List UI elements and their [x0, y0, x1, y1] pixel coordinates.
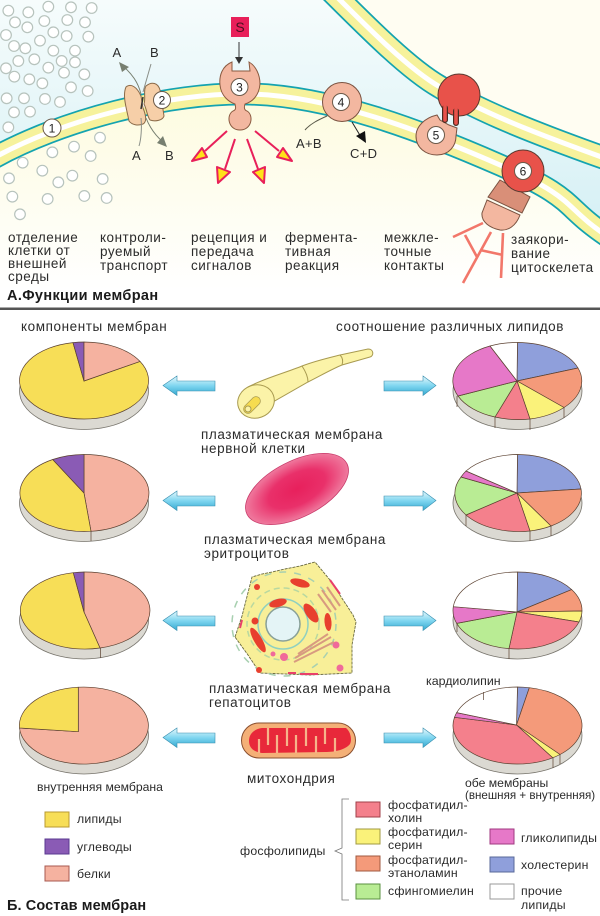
captions: сигналов [191, 258, 252, 273]
legend: phospholipids [240, 798, 474, 900]
anchoring protein 6 with cytoskeleton [453, 150, 544, 283]
legend: components: углеводы [77, 840, 132, 854]
captions: отделение [8, 230, 78, 245]
transport arrows and labels: A [132, 148, 141, 163]
captions: рецепция и [191, 230, 267, 245]
captions: точные [384, 244, 432, 259]
legend: other lipids: холестерин [521, 858, 589, 872]
legend: components [45, 812, 132, 881]
arrow: to lipids [384, 376, 436, 396]
panel: membrane composition [7, 319, 597, 914]
captions: транспорт [100, 258, 168, 273]
captions: фермента- [285, 230, 358, 245]
signal molecule S [231, 17, 249, 64]
receptor protein 3: 3 [236, 80, 243, 94]
arrow: to components [163, 376, 215, 396]
captions: среды [8, 269, 50, 284]
icon: mitochondrion [242, 723, 356, 758]
column heading: components: компоненты мембран [21, 319, 167, 334]
captions: межкле- [384, 230, 439, 245]
caption: inner membrane: внутренняя мембрана [37, 780, 163, 794]
legend: phospholipids: серин [388, 838, 422, 852]
transport arrows and labels: B [165, 148, 174, 163]
caption: hepatocyte membrane: гепатоцитов [209, 695, 292, 710]
enzyme 4: A+B [296, 136, 322, 151]
legend: other lipids: гликолипиды [521, 831, 597, 845]
enzyme 4 [296, 82, 377, 161]
pie: mitochondrial lipids [453, 687, 582, 774]
captions: контроли- [100, 230, 166, 245]
caption: erythrocyte membrane: эритроцитов [204, 546, 290, 561]
arrow: to lipids [384, 491, 436, 510]
signal molecule S: S [235, 19, 245, 35]
captions: заякори- [511, 232, 569, 247]
legend: phospholipids: сфингомиелин [388, 884, 474, 898]
neighbouring cell background [340, 0, 600, 158]
pie: nerve cell lipids [453, 342, 582, 430]
pie: hepatocyte components [20, 572, 150, 659]
column heading: lipid ratios: соотношение различных липидов [336, 319, 564, 334]
caption: erythrocyte membrane [204, 532, 386, 561]
caption: nerve cell membrane [201, 427, 383, 456]
heading A: А.Функции мембран [7, 288, 158, 304]
captions: руемый [100, 244, 151, 259]
membrane of the cell [0, 94, 600, 238]
caption: both membranes: (внешняя + внутренняя) [465, 789, 595, 802]
captions: клетки от [8, 243, 70, 258]
arrow: to lipids [384, 728, 436, 748]
enzyme 4: C+D [350, 146, 377, 161]
extracellular background [0, 0, 600, 230]
transport protein 2 [124, 83, 170, 125]
captions: реакция [285, 258, 340, 273]
panel: membrane functions [0, 0, 600, 304]
captions: вание [511, 246, 551, 261]
caption: both membranes [465, 776, 595, 802]
arrow: to lipids [384, 611, 436, 630]
marker 1: 1 [49, 122, 56, 136]
icon: erythrocyte [234, 439, 360, 539]
arrow: to components [163, 728, 215, 748]
pie: erythrocyte lipids [453, 454, 582, 542]
caption: erythrocyte membrane: плазматическая мембрана [204, 532, 386, 547]
icon: nerve fibre [233, 349, 373, 423]
legend: phospholipids: фосфатидил- [388, 825, 468, 839]
signal arrows [192, 131, 292, 183]
caption: nerve cell membrane: плазматическая мембрана [201, 427, 383, 442]
pie: hepatocyte lipids [453, 572, 582, 659]
legend: phospholipids: этаноламин [388, 866, 458, 880]
transport arrows and labels: A [112, 45, 122, 60]
legend: other lipids: прочие [521, 884, 562, 898]
captions: тивная [285, 244, 331, 259]
pie: nerve cell components [20, 342, 149, 430]
caption: hepatocyte membrane: плазматическая мембрана [209, 681, 391, 696]
arrow: to components [163, 611, 215, 630]
legend: components: липиды [77, 812, 122, 826]
caption: hepatocyte membrane [209, 681, 391, 710]
cytoplasm background [0, 94, 600, 290]
vesicles outside the cell [1, 1, 112, 220]
caption: cardiolipin: кардиолипин [426, 674, 501, 688]
icon: hepatocyte [232, 562, 356, 676]
legend: other lipids [490, 829, 597, 912]
legend: other lipids: липиды [521, 898, 566, 912]
cell contact 5: 5 [433, 128, 440, 142]
pie: erythrocyte components [20, 454, 149, 542]
captions: цитоскелета [511, 260, 594, 275]
legend: phospholipids: фосфатидил- [388, 798, 468, 812]
marker 1 [43, 119, 61, 137]
legend: phospholipids: фосфолипиды [240, 844, 326, 858]
legend: phospholipids: холин [388, 811, 422, 825]
transport protein 2: 2 [159, 94, 166, 108]
transport arrows and labels: B [150, 45, 159, 60]
pie: inner mitochondrial membrane components [19, 687, 148, 774]
captions: передача [191, 244, 254, 259]
transport arrows and labels [112, 45, 174, 163]
legend: phospholipids: фосфатидил- [388, 853, 468, 867]
enzyme 4: 4 [338, 96, 345, 110]
captions: внешней [8, 256, 67, 271]
caption: both membranes: обе мембраны [465, 776, 548, 790]
caption: mitochondrion: митохондрия [247, 771, 335, 786]
receptor protein 3 [220, 62, 260, 130]
heading B: Б. Состав мембран [7, 898, 146, 914]
arrow: to components [163, 491, 215, 510]
captions [8, 230, 594, 284]
captions: контакты [384, 258, 445, 273]
caption: nerve cell membrane: нервной клетки [201, 441, 306, 456]
anchoring protein 6 with cytoskeleton: 6 [520, 164, 527, 178]
membrane of the neighbouring cell [330, 0, 600, 160]
cell contact 5 [416, 74, 480, 155]
legend: components: белки [77, 867, 111, 881]
